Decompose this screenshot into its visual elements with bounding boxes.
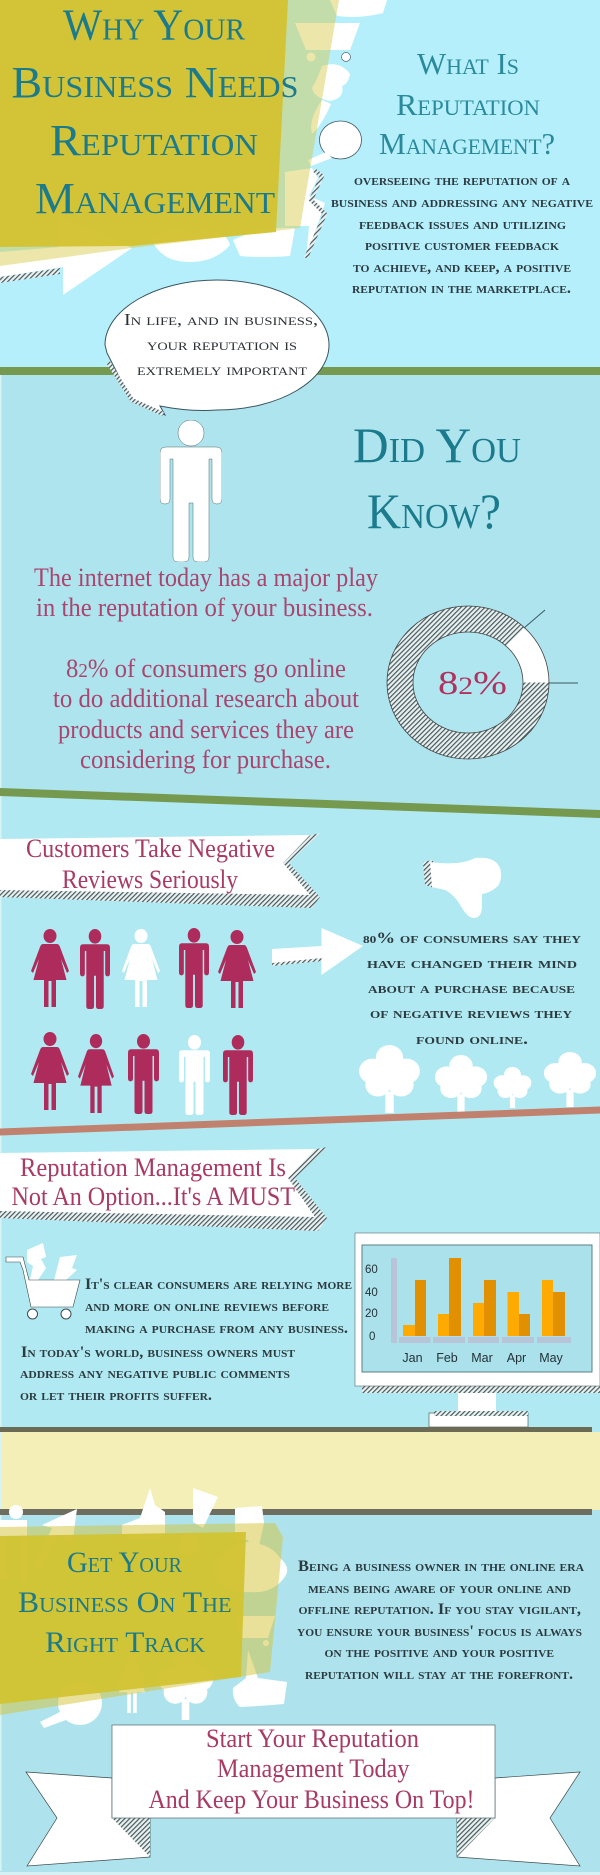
- heading: get your business on the right track: Right Track: [45, 1626, 205, 1659]
- chart axis: [391, 1258, 571, 1343]
- banner: customers take negative reviews: Reviews Seriously: [62, 865, 238, 894]
- definition text: to achieve, and keep, a positive: [353, 259, 571, 276]
- title: [12, 0, 298, 223]
- heading: what is reputation management: What Is: [417, 46, 519, 81]
- chart y axis labels: 40: [365, 1287, 378, 1299]
- green divider slanted: [0, 788, 600, 818]
- statistic text: of negative reviews they: [370, 1005, 572, 1022]
- consumer statistic text: to do additional research about: [53, 684, 360, 713]
- bottom call-to-action ribbon: Start Your Reputation: [206, 1724, 419, 1753]
- definition text: [331, 172, 593, 297]
- statistic text: found online.: [416, 1031, 528, 1048]
- speech bubble: [105, 280, 329, 415]
- definition text: reputation in the marketplace.: [352, 280, 571, 297]
- title: Why Your: [63, 0, 245, 50]
- green divider: [0, 367, 600, 375]
- big arrow: [0, 215, 132, 295]
- bottom call-to-action ribbon: Management Today: [217, 1754, 410, 1783]
- heading: get your business on the right track: [18, 1546, 232, 1659]
- bottom call-to-action ribbon: [26, 1724, 580, 1866]
- body text: consumers relying on reviews: making a purchase from any business.: [85, 1320, 348, 1337]
- speech bubble: extremely important: [137, 360, 308, 379]
- lower yellow title block: [0, 1523, 283, 1715]
- people pictogram: [31, 928, 256, 1115]
- dark divider under cream band: [0, 1509, 592, 1515]
- title: Business Needs: [12, 58, 298, 107]
- banner: customers take negative reviews: [0, 833, 320, 908]
- trees: [359, 1045, 596, 1113]
- speech bubble: your reputation is: [147, 335, 297, 354]
- closing body text: means being aware of your online and: [308, 1580, 571, 1597]
- chart month labels: [402, 1351, 564, 1365]
- lower decorative icons: [0, 1488, 287, 1728]
- brown divider: [0, 1106, 600, 1136]
- heading: get your business on the right track: Business On The: [18, 1586, 232, 1619]
- definition text: overseeing the reputation of a: [354, 172, 570, 189]
- title: Management: [35, 174, 275, 223]
- consumer statistic text: considering for purchase.: [80, 745, 331, 774]
- speech bubble: In life, and in business,: [124, 310, 318, 329]
- dark divider over cream band: [0, 1427, 592, 1432]
- consumer statistic text: [53, 654, 360, 774]
- statistic text: have changed their mind: [367, 955, 577, 972]
- chart month labels: Apr: [507, 1351, 526, 1365]
- chart y axis labels: 20: [365, 1308, 378, 1320]
- chart month labels: Jan: [402, 1351, 423, 1365]
- definition text: positive customer feedback: [365, 237, 559, 254]
- heading: what is reputation management: [379, 46, 555, 161]
- body text: consumers relying on reviews: or let their profits suffer.: [20, 1387, 212, 1404]
- title: Reputation: [50, 116, 258, 165]
- banner: reputation management is a must: [0, 1147, 327, 1231]
- body text: consumers relying on reviews: [20, 1276, 352, 1404]
- consumer statistic text: 82% of consumers go online: [66, 654, 346, 683]
- banner: reputation management is a must: Not An Option...It's A MUST: [12, 1182, 295, 1211]
- body text: consumers relying on reviews: In today's world, business owners must: [21, 1344, 296, 1361]
- definition text: business and addressing any negative: [331, 194, 593, 211]
- statistic text: about a purchase because: [368, 980, 575, 997]
- chart light bars: [403, 1280, 553, 1336]
- heading: what is reputation management: Management?: [379, 126, 555, 161]
- internet text: The internet today has a major play: [34, 563, 378, 592]
- closing body text: Being a business owner in the online era: [298, 1558, 584, 1575]
- donut chart 82%: [387, 606, 578, 759]
- monitor with bar chart: [355, 1233, 600, 1427]
- chart y axis labels: [365, 1264, 378, 1343]
- internet text: [34, 563, 378, 622]
- statistic text: 80% of consumers say they: [363, 930, 581, 947]
- chart y axis labels: 0: [369, 1331, 375, 1343]
- statistic text: [363, 930, 581, 1048]
- closing body text: on the positive and your positive: [324, 1644, 554, 1661]
- banner: customers take negative reviews: Customers Take Negative: [26, 834, 275, 863]
- heading: did you know: [353, 417, 521, 539]
- definition text: feedback issues and utilizing: [359, 216, 566, 233]
- chart dark bars: [415, 1258, 565, 1336]
- icon: white person: [160, 420, 222, 562]
- closing body text: reputation will stay at the forefront.: [305, 1666, 573, 1683]
- heading: did you know: Did You: [353, 417, 521, 473]
- consumer statistic text: products and services they are: [58, 715, 354, 744]
- chart month labels: May: [539, 1351, 564, 1365]
- heading: what is reputation management: Reputation: [396, 87, 540, 122]
- arrow to statistic: [272, 928, 363, 975]
- yellow title block: [0, 0, 339, 266]
- icon: thumbs down: [423, 858, 501, 918]
- chart month labels: Feb: [436, 1351, 458, 1365]
- closing body text: you ensure your business' focus is always: [297, 1623, 582, 1640]
- body text: consumers relying on reviews: It's clear consumers are relying more: [85, 1276, 352, 1293]
- chart month labels: Mar: [471, 1351, 493, 1365]
- body text: consumers relying on reviews: and more on online reviews before: [85, 1298, 329, 1315]
- chart y axis labels: 60: [365, 1264, 378, 1276]
- donut chart 82%: 82%: [438, 665, 507, 702]
- heading: get your business on the right track: Get Your: [67, 1546, 182, 1579]
- header decorative icons: [151, 0, 387, 262]
- internet text: in the reputation of your business.: [36, 593, 373, 622]
- closing body text: offline reputation. If you stay vigilant,: [298, 1601, 581, 1618]
- heading: did you know: Know?: [367, 483, 501, 539]
- body text: consumers relying on reviews: address any negative public comments: [20, 1365, 290, 1382]
- banner: reputation management is a must: Reputation Management Is: [20, 1153, 286, 1182]
- closing body text: [297, 1558, 584, 1683]
- bottom call-to-action ribbon: And Keep Your Business On Top!: [148, 1785, 474, 1814]
- icon: shopping cart: [6, 1243, 80, 1319]
